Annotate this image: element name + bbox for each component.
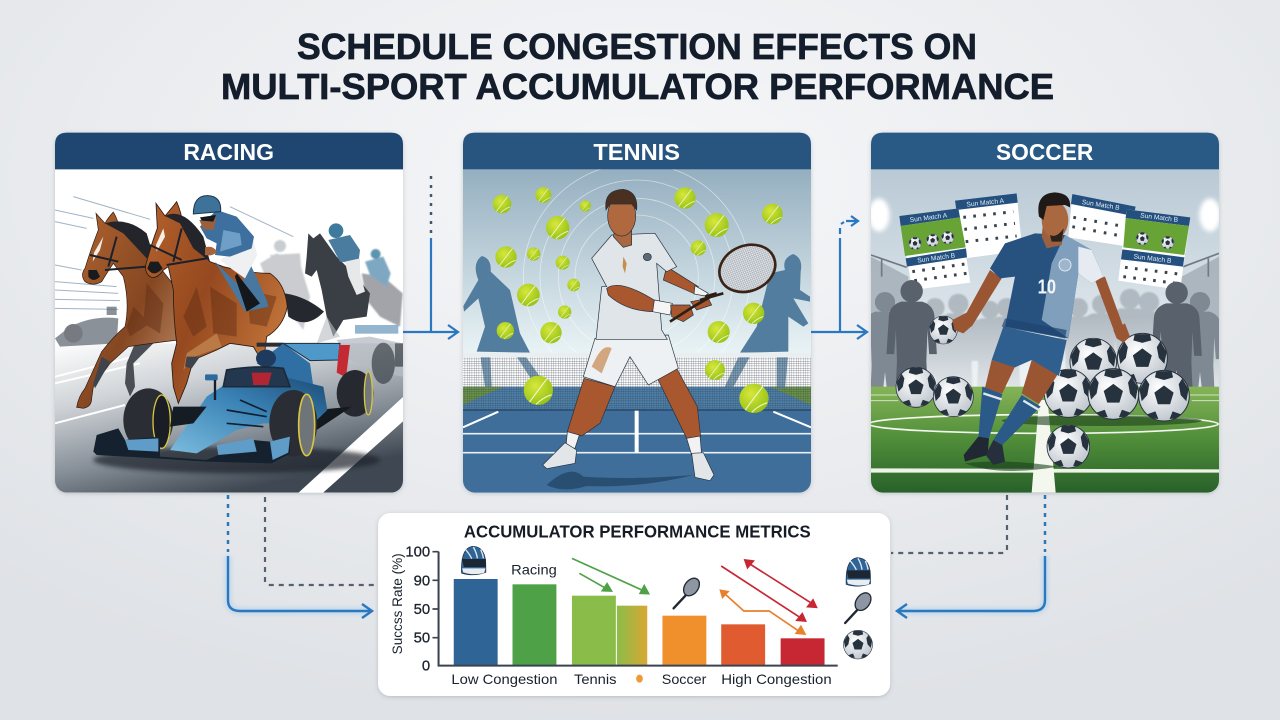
calendars: Sun Match B	[1081, 199, 1121, 212]
x axis labels: Tennis	[574, 671, 617, 687]
tennis racket	[670, 237, 782, 322]
jockey	[193, 196, 260, 312]
x axis labels	[451, 561, 832, 687]
icon: legend tennis racket	[845, 590, 874, 623]
title: MULTI-SPORT ACCUMULATOR PERFORMANCE	[221, 66, 1054, 107]
horse: rear	[77, 212, 178, 408]
header bar: racing	[55, 133, 403, 169]
header bar: soccer	[871, 133, 1219, 169]
panel: racing	[55, 133, 403, 493]
track	[55, 343, 403, 493]
y axis labels: 50	[414, 602, 430, 618]
header bar: soccer: SOCCER	[996, 139, 1094, 165]
calendars: Sun Match B	[917, 252, 956, 265]
soccer balls	[896, 316, 1202, 468]
background race car right	[337, 325, 403, 384]
net	[463, 355, 811, 410]
stands	[871, 257, 1219, 387]
horse: front	[146, 202, 287, 403]
header bar: tennis: TENNIS	[593, 139, 680, 165]
x axis labels: Racing	[511, 561, 557, 577]
connector: tennis to soccer arrow	[811, 216, 867, 339]
background ghost horse	[260, 240, 310, 330]
calendars: Sun Match B	[1133, 253, 1172, 265]
y axis labels: 50	[414, 631, 430, 647]
icon: tennis racket	[674, 575, 703, 608]
y axis labels: 0	[422, 659, 430, 675]
saddle	[215, 262, 268, 312]
calendars: Sun Match A	[909, 212, 948, 224]
icon: racing helmet	[461, 546, 486, 575]
x axis labels: Low Congestion	[451, 671, 557, 687]
x axis labels: High Congestion	[721, 671, 832, 687]
soccer player: 10	[1038, 276, 1056, 298]
pitch	[871, 387, 1219, 493]
background dark horse	[305, 223, 370, 343]
connector: soccer to metrics arrows	[891, 495, 1045, 618]
header bar: tennis	[463, 133, 811, 169]
icon: legend soccer ball	[843, 630, 872, 659]
calendars	[899, 193, 1190, 290]
icon: legend racing helmet	[846, 558, 870, 586]
stadium lights	[868, 198, 1221, 232]
y axis labels: 90	[414, 573, 430, 589]
trend arrows	[572, 558, 816, 634]
header bar: racing: RACING	[183, 139, 274, 165]
panel: tennis	[463, 133, 811, 493]
bar chart	[390, 545, 838, 687]
race car main	[93, 343, 380, 473]
background player silhouettes	[926, 288, 1162, 386]
panel: accumulator performance metrics	[378, 513, 890, 696]
y axis labels	[405, 545, 430, 675]
opponent silhouettes	[463, 254, 810, 390]
y axis labels: 100	[405, 545, 430, 561]
chart title: ACCUMULATOR PERFORMANCE METRICS	[464, 521, 811, 541]
title	[221, 26, 1054, 107]
x axis labels: Soccer	[662, 671, 707, 687]
panel: soccer	[862, 133, 1223, 493]
player shadow	[547, 472, 693, 489]
background small jockey group	[362, 249, 403, 327]
court	[463, 410, 811, 493]
tail	[285, 293, 324, 322]
title: SCHEDULE CONGESTION EFFECTS ON	[297, 26, 977, 67]
background race car left	[55, 307, 118, 347]
calendars: Sun Match B	[1140, 212, 1179, 224]
connector: racing to tennis arrow	[403, 176, 458, 339]
tennis player	[543, 189, 714, 481]
tennis balls	[493, 187, 783, 413]
soccer player	[952, 192, 1130, 471]
connector: racing to metrics arrows	[228, 495, 378, 618]
y axis title: Succss Rate (%)	[390, 553, 405, 654]
calendars: Sun Match A	[966, 198, 1005, 209]
